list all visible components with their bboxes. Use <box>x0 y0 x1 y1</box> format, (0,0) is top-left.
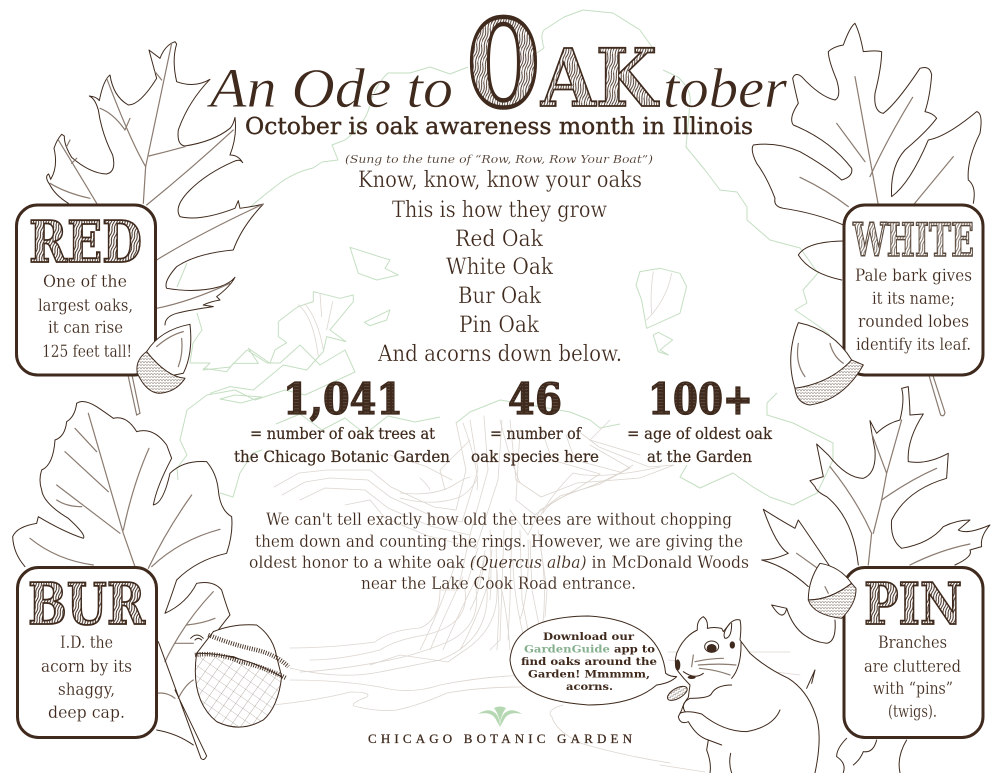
song note: (Sung to the tune of “Row, Row, Row Your Boat”) <box>345 152 653 166</box>
description: pin: Branches <box>878 633 947 652</box>
white oak leaf <box>752 23 981 416</box>
stat: oldest oak age <box>627 375 773 466</box>
red oak leaf <box>47 42 263 415</box>
title <box>206 0 787 135</box>
squirrel mouth <box>688 676 696 679</box>
description: bur: acorn by its <box>41 657 132 676</box>
song lyrics: Bur Oak <box>458 284 542 309</box>
stat: oak species: = number of <box>490 425 582 443</box>
title script: An Ode to: An Ode to <box>206 58 453 120</box>
squirrel <box>665 617 819 773</box>
song lyrics: Know, know, know your oaks <box>358 168 642 193</box>
logo: chicago botanic garden <box>368 706 633 746</box>
description: pin: are cluttered <box>864 657 961 676</box>
description: white: Pale bark gives <box>855 266 972 285</box>
paragraph: oldest honor to a white oak (Quercus alba) in McDonald Woods <box>249 553 749 572</box>
icon: white acorn <box>791 323 863 405</box>
song lyrics: And acorns down below. <box>377 342 622 367</box>
panel: bur <box>18 568 156 738</box>
description: bur: I.D. the <box>60 633 113 652</box>
icon: bur acorn <box>191 625 288 727</box>
stat: oldest oak age: 100+ <box>648 375 753 425</box>
panel: pin <box>844 568 983 738</box>
song lyrics: Red Oak <box>455 227 544 252</box>
song lyrics: White Oak <box>446 255 554 280</box>
description: pin: (twigs). <box>888 702 937 721</box>
stat: oldest oak age: = age of oldest oak <box>627 425 773 443</box>
stat: oak species <box>471 375 599 466</box>
title wood letters AK: AK <box>540 31 659 125</box>
description: white: identify its leaf. <box>856 335 971 354</box>
heading: red: RED <box>29 209 142 276</box>
description: pin <box>864 633 961 721</box>
stat: oak trees: = number of oak trees at <box>250 425 436 443</box>
speech bubble: find oaks around the <box>521 656 657 668</box>
stat: oldest oak age: at the Garden <box>647 448 752 466</box>
panel: red <box>16 205 156 375</box>
description: red: largest oaks, <box>38 296 133 315</box>
speech bubble: GardenGuide app to <box>524 644 655 656</box>
description: bur: deep cap. <box>48 703 125 722</box>
icon: red acorn <box>137 324 191 393</box>
squirrel eye ring <box>705 641 719 652</box>
description: bur: shaggy, <box>58 680 115 699</box>
song lyrics: Pin Oak <box>459 313 540 338</box>
stat: oak species: oak species here <box>471 448 599 466</box>
description: red: it can rise <box>48 318 123 337</box>
squirrel nose <box>675 659 680 671</box>
logo wordmark: CHICAGO BOTANIC GARDEN <box>368 731 633 746</box>
paragraph: near the Lake Cook Road entrance. <box>361 574 636 593</box>
speech bubble: acorns. <box>566 681 613 693</box>
description: white <box>855 266 972 354</box>
squirrel held acorn <box>665 683 689 703</box>
song lyrics: This is how they grow <box>392 198 607 223</box>
stat: oak trees: 1,041 <box>283 375 403 425</box>
description: white: rounded lobes <box>858 312 969 331</box>
icon: pin acorn <box>808 563 856 618</box>
speech bubble <box>510 616 677 705</box>
heading: bur: BUR <box>28 571 145 638</box>
description: red <box>38 272 133 361</box>
pin oak leaf <box>762 387 990 773</box>
description: bur <box>41 633 132 722</box>
bur oak leaf <box>13 401 232 760</box>
stat: oak species: 46 <box>508 375 562 425</box>
description: white: it its name; <box>872 289 955 308</box>
paragraph: them down and counting the rings. However, we are giving the <box>255 532 743 551</box>
subtitle: October is oak awareness month in Illinois <box>245 114 753 140</box>
song lyrics <box>358 168 642 367</box>
background oak tree contour lines <box>273 416 800 772</box>
paragraph: We can't tell exactly how old the trees are without chopping <box>266 510 732 529</box>
description: pin: with “pins” <box>873 679 953 698</box>
stat: oak trees <box>234 375 450 466</box>
logo leaf mark <box>478 706 522 727</box>
speech bubble: Download our <box>543 631 635 643</box>
speech bubble: Garden! Mmmmm, <box>528 668 650 680</box>
title script: tober: tober <box>663 58 787 120</box>
background tree crown outline <box>177 10 833 505</box>
squirrel eye <box>707 644 717 653</box>
panel: white <box>844 205 983 375</box>
paragraph <box>249 510 749 593</box>
canopy leaf clusters <box>203 247 687 393</box>
description: red: 125 feet tall! <box>42 342 132 361</box>
description: red: One of the <box>43 272 127 291</box>
stat: oak trees: the Chicago Botanic Garden <box>234 448 450 466</box>
heading: pin: PIN <box>864 571 962 638</box>
squirrel far eye <box>730 641 735 649</box>
